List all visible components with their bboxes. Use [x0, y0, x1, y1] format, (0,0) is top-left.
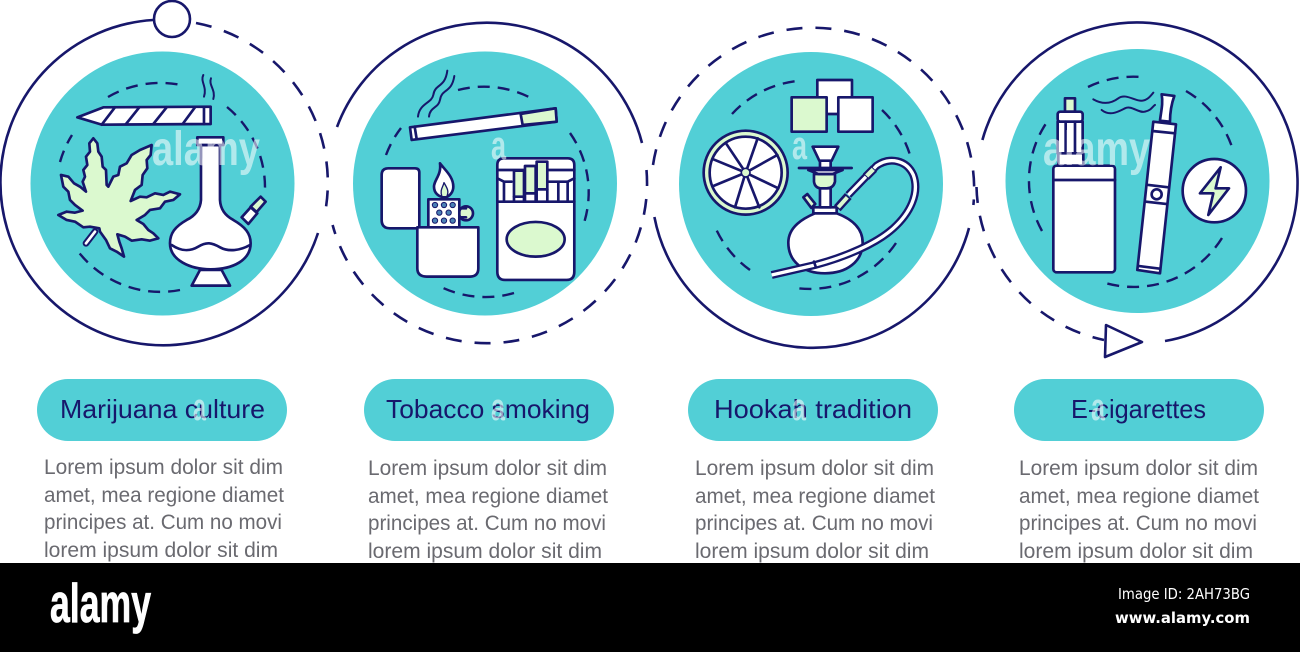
teal disc 1: [30, 52, 294, 316]
body text: tobacco smoking: [368, 457, 608, 563]
arrowhead: [1105, 325, 1142, 357]
website url: www.alamy.com: [1115, 609, 1250, 627]
body text: tobacco smoking: lorem ipsum dolor sit dim: [368, 540, 602, 563]
body text: hookah tradition: Lorem ipsum dolor sit dim: [695, 457, 934, 480]
image id: Image ID: 2AH73BG: [1118, 585, 1250, 603]
icon: lighter: [382, 163, 478, 277]
panel: tobacco smoking: [333, 23, 647, 343]
icon: hookah: [772, 147, 915, 275]
timeline ring 4: [976, 22, 1298, 341]
watermark: alamy 4: alamy: [1043, 123, 1150, 176]
icon: cannabis leaf: [58, 138, 180, 257]
body text: tobacco smoking: amet, mea regione diamet: [368, 485, 608, 508]
body text: e-cigarettes: [1019, 457, 1259, 563]
icon: joint: [77, 75, 214, 125]
pill: hookah tradition: [688, 379, 938, 441]
column: e-cigarettes text: [1014, 379, 1264, 563]
icon: vapour waves: [1093, 93, 1155, 113]
heading: e-cigarettes: E-cigarettes: [1071, 394, 1206, 424]
panel: hookah tradition: [653, 28, 974, 348]
body text: e-cigarettes: amet, mea regione diamet: [1019, 485, 1259, 508]
column: marijuana text: [37, 379, 287, 562]
pill: tobacco smoking: [364, 379, 614, 441]
panel: marijuana culture: [0, 1, 328, 345]
watermark: pill letters: [193, 387, 1106, 429]
inner dashed ring 4: [1029, 77, 1232, 287]
inner dashed ring 1: [60, 83, 265, 292]
watermark: pill letters: a: [1091, 387, 1106, 429]
timeline ring 1: [0, 1, 328, 345]
teal disc 4: [1006, 49, 1270, 313]
body text: hookah tradition: [695, 457, 935, 563]
watermark: pill letters: a: [792, 387, 807, 429]
column: hookah text: [688, 379, 938, 563]
icon: charcoal cubes: [792, 80, 873, 132]
watermark: letter a 3: a: [792, 124, 808, 168]
icon: vape pen: [1137, 94, 1176, 273]
body text: e-cigarettes: principes at. Cum no movi: [1019, 512, 1257, 535]
inner dashed ring 3: [716, 81, 910, 289]
body text: marijuana culture: Lorem ipsum dolor sit dim: [44, 456, 283, 479]
body text: e-cigarettes: Lorem ipsum dolor sit dim: [1019, 457, 1258, 480]
teal disc 3: [679, 52, 943, 316]
watermark: pill letters: a: [193, 387, 207, 429]
icon: cigarette pack: [497, 158, 574, 280]
body text: hookah tradition: amet, mea regione diamet: [695, 485, 935, 508]
body text: hookah tradition: lorem ipsum dolor sit dim: [695, 540, 929, 563]
icon: cigarette: [410, 71, 557, 140]
body text: tobacco smoking: principes at. Cum no movi: [368, 512, 606, 535]
pill: marijuana culture: [37, 379, 287, 441]
icon: lightning badge: [1183, 159, 1246, 222]
watermark: letter a 2: a: [491, 124, 507, 168]
body text: marijuana culture: lorem ipsum dolor sit dim: [44, 539, 278, 562]
heading: hookah tradition: Hookah tradition: [714, 394, 912, 424]
footer: black stock photo band: [0, 563, 1300, 652]
watermark: alamy 1: alamy: [152, 123, 260, 176]
body text: marijuana culture: amet, mea regione diamet: [44, 484, 284, 507]
pill: e-cigarettes: [1014, 379, 1264, 441]
heading: marijuana culture: Marijuana culture: [60, 394, 265, 424]
body text: hookah tradition: principes at. Cum no movi: [695, 512, 933, 535]
column: tobacco text: [364, 379, 614, 563]
heading: tobacco smoking: Tobacco smoking: [386, 394, 590, 424]
body text: marijuana culture: principes at. Cum no movi: [44, 511, 282, 534]
watermark: pill letters: a: [491, 387, 506, 429]
logo: alamy: alamy: [50, 572, 151, 634]
body text: e-cigarettes: lorem ipsum dolor sit dim: [1019, 540, 1253, 563]
icon: box mod vape: [1053, 98, 1115, 272]
icon: citrus slice: [704, 131, 788, 215]
timeline ring 2: [333, 23, 647, 343]
panel: e-cigarettes: [976, 22, 1298, 357]
body text: tobacco smoking: Lorem ipsum dolor sit dim: [368, 457, 607, 480]
timeline ring 3: [653, 28, 974, 348]
icon: bong: [170, 137, 266, 286]
teal disc 2: [353, 52, 617, 316]
body text: marijuana culture: [44, 456, 284, 562]
inner dashed ring 2: [386, 87, 589, 297]
